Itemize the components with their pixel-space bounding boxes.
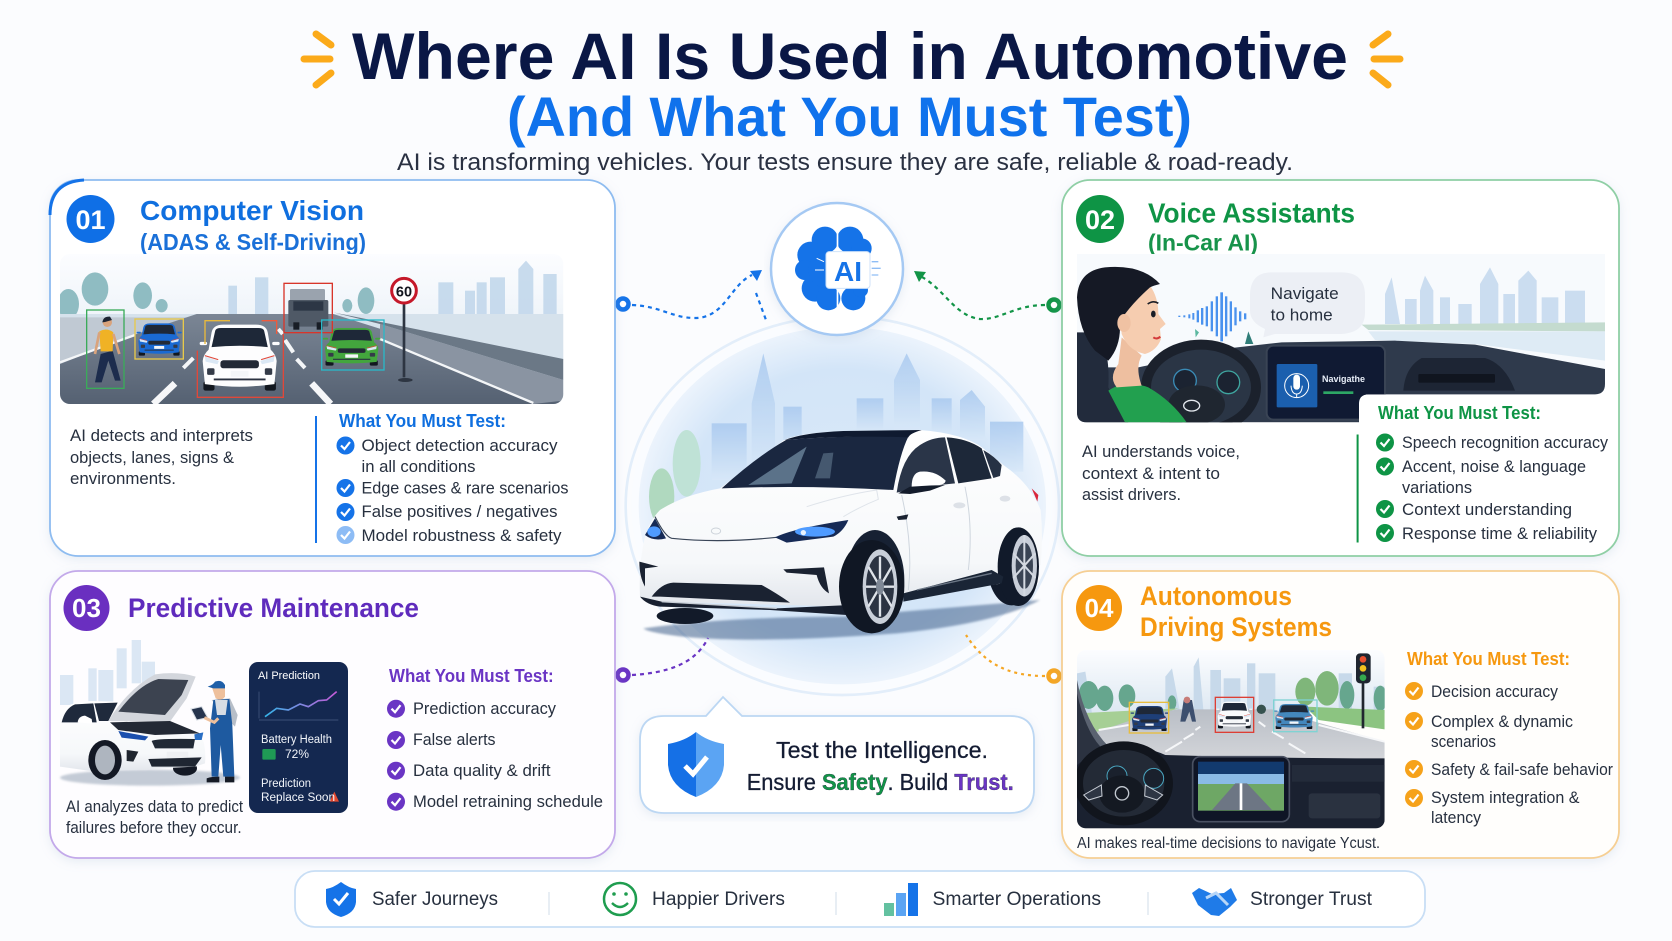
benefit: safer journeys [326,882,498,917]
benefit: smarter operations: Smarter Operations [932,889,1101,910]
heading: Computer Vision [140,195,364,226]
checklist: what you must test: Model robustness & safety [362,526,562,545]
callout text [747,737,1014,795]
bubble text: Navigate [1271,284,1339,303]
central car scene [626,316,1059,695]
checklist: what you must test [1376,403,1608,543]
checklist: what you must test [387,666,603,811]
speed sign value: 60 [396,284,412,300]
arrow: voice assistants to AI [914,271,1060,319]
sound wave [1178,292,1246,341]
AI prediction panel: Replace Soon [261,792,335,804]
subheading: (ADAS & Self-Driving) [140,229,366,255]
checklist: what you must test: What You Must Test: [1378,403,1541,423]
description [66,797,243,837]
badge 01: 01 [75,205,106,235]
benefit: stronger trust [1192,888,1373,916]
description: AI understands voice, [1082,442,1240,461]
checklist: what you must test: in all conditions [362,457,476,476]
checklist: what you must test: Accent, noise & language [1402,457,1586,476]
description [1082,442,1240,504]
illustration: woman talking to car [1077,254,1607,430]
checklist: what you must test: Context understanding [1402,500,1572,519]
bubble text [1271,284,1339,325]
car [639,430,1042,640]
description: AI detects and interprets [70,426,253,445]
description: failures before they occur. [66,818,242,837]
AI prediction panel: 72% [285,747,309,761]
checklist: what you must test: Edge cases & rare scenarios [362,478,568,498]
tagline: AI is transforming vehicles. Your tests ensure they are safe, reliable & road-ready. [397,149,1293,176]
panel: 01 computer vision [50,180,615,556]
checklist: what you must test: False alerts [413,730,496,749]
checklist: what you must test: Data quality & drift [413,761,551,780]
checklist: what you must test: Object detection accuracy [362,436,558,455]
checklist: what you must test: variations [1402,478,1472,497]
panel: 03 predictive maintenance [50,571,615,858]
illustration: autonomous cockpit view [1077,650,1387,828]
callout text: Ensure Safety. Build Trust. [747,769,1014,795]
heading: Autonomous [1140,581,1292,611]
speech bubble [1250,272,1365,337]
badge 02 [1076,195,1124,243]
heading [1140,581,1332,642]
arrow: autonomous driving to car [966,635,1060,682]
icon: left sparks [304,34,331,85]
truck [288,289,328,330]
screen text: Navigathe [1322,374,1365,385]
badge 03 [64,585,110,631]
screen [1267,346,1385,420]
badge 04 [1076,585,1122,631]
AI prediction panel: AI Prediction [258,670,320,682]
checklist: what you must test: False positives / negatives [362,502,558,521]
icon: right sparks [1373,34,1400,85]
icon: AI brain badge [771,203,903,335]
checklist: what you must test [336,411,568,545]
benefit: stronger trust: Stronger Trust [1250,889,1373,910]
traffic light [1356,653,1371,728]
callout: test the intelligence [640,697,1034,813]
AI prediction panel [249,662,348,813]
checklist: what you must test: Decision accuracy [1431,682,1558,701]
benefit: safer journeys: Safer Journeys [372,889,498,910]
arrow: computer vision to AI [618,270,766,320]
checklist: what you must test: Speech recognition accuracy [1402,433,1608,452]
panel: 02 voice assistants [1062,180,1619,556]
badge 02: 02 [1085,205,1115,235]
description: assist drivers. [1082,485,1181,504]
checklist: what you must test: Safety & fail-safe behavior [1431,760,1613,779]
icon: shield [668,732,724,797]
AI prediction panel: Prediction [261,778,311,790]
woman [1077,332,1128,422]
AI prediction panel: Battery Health [261,734,332,746]
benefit: happier drivers [604,883,785,915]
arrow: predictive maintenance to car [618,638,708,680]
pedestrian [95,317,121,382]
checklist: what you must test: What You Must Test: [1407,649,1570,669]
description: objects, lanes, signs & [70,448,235,467]
illustration: road detection scene [58,254,563,404]
benefit: happier drivers: Happier Drivers [652,889,785,910]
checklist: what you must test: Model retraining schedule [413,792,603,811]
heading: Predictive Maintenance [128,593,419,623]
description: context & intent to [1082,464,1220,483]
caption: AI makes real-time decisions to navigate Ycust. [1077,835,1380,852]
mechanic [191,681,238,782]
callout text: Test the Intelligence. [776,737,988,763]
checklist: what you must test: What You Must Test: [339,411,506,431]
heading: Driving Systems [1140,612,1332,642]
checklist: what you must test: System integration & [1431,788,1580,807]
title: main heading: Where AI Is Used in Automotive [352,19,1348,93]
steering wheel [1146,345,1256,430]
checklist: what you must test [1405,649,1613,827]
description [70,426,253,488]
badge 04: 04 [1085,593,1114,623]
heading: Voice Assistants [1148,198,1355,228]
description: AI analyzes data to predict [66,797,243,816]
subheading: (In-Car AI) [1148,230,1258,256]
checklist: what you must test: latency [1431,808,1481,827]
checklist: what you must test: Prediction accuracy [413,699,556,718]
description: environments. [70,469,176,488]
badge 01 [66,195,114,243]
illustration: mechanic and car [60,640,240,786]
benefit: smarter operations [884,883,1101,916]
badge 03: 03 [72,593,101,623]
bubble text: to home [1271,306,1333,325]
checklist: what you must test: scenarios [1431,732,1496,751]
checklist: what you must test: Complex & dynamic [1431,712,1573,731]
checklist: what you must test: Response time & reliability [1402,524,1597,543]
checklist: what you must test: What You Must Test: [389,666,554,686]
icon: AI brain badge: AI [834,256,862,287]
panel: 04 autonomous driving [1062,571,1619,858]
panel: benefits bar [295,871,1425,927]
subtitle: (And What You Must Test) [507,85,1192,148]
